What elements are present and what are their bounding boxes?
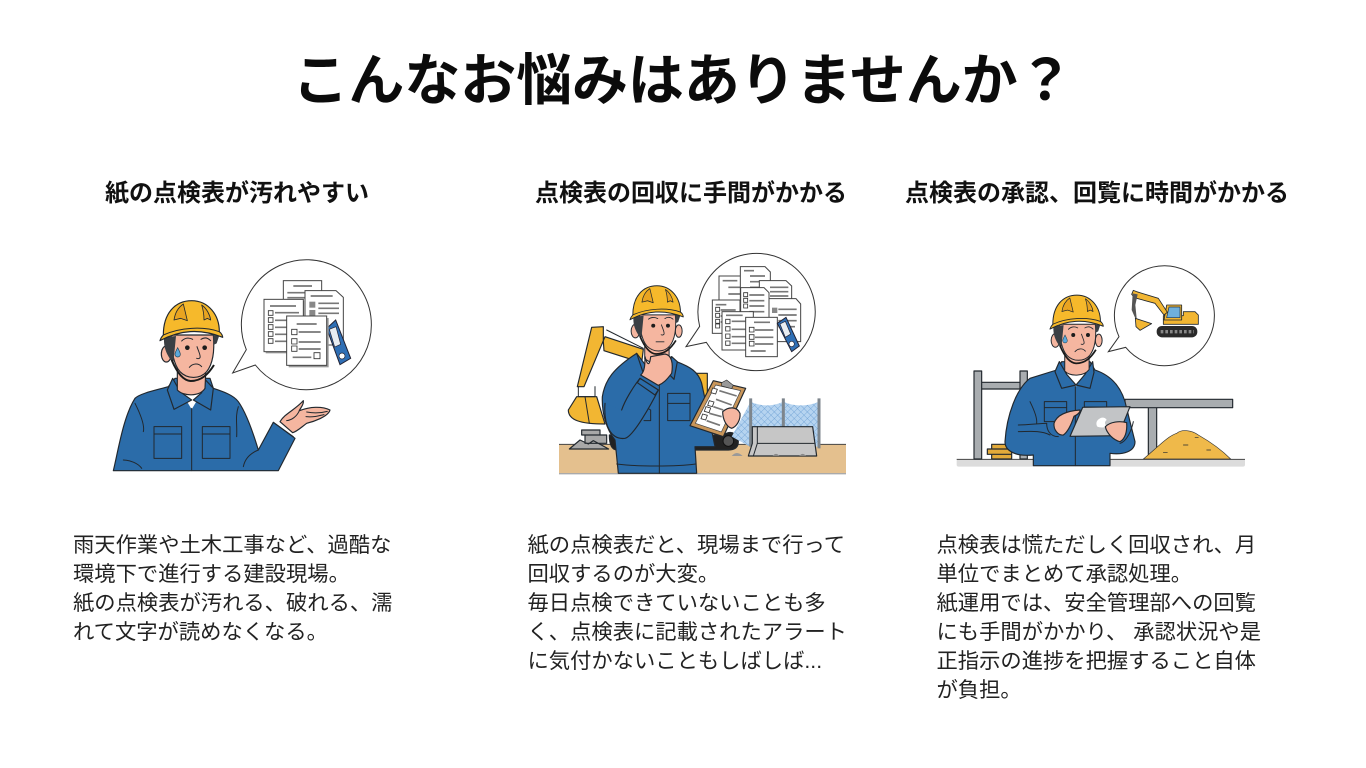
- body text: [528, 532, 847, 672]
- panel: collecting checklists: [528, 180, 847, 672]
- body text: 紙の点検表が汚れる、破れる、濡: [73, 590, 392, 614]
- worker body in blue coveralls: [113, 378, 295, 471]
- body text: にも手間がかかり、 承認状況や是: [936, 620, 1261, 644]
- speech bubble with documents: [233, 260, 371, 390]
- body text: 点検表は慌ただしく回収され、月: [936, 532, 1256, 556]
- sand pile: [1143, 431, 1231, 459]
- site structure and ground: [957, 371, 1245, 467]
- wooden planks: [987, 444, 1012, 459]
- body text: 回収するのが大変。: [528, 562, 719, 586]
- body text: 紙運用では、安全管理部への回覧: [936, 590, 1256, 614]
- body text: れて文字が読めなくなる。: [73, 620, 328, 644]
- tablet: [1070, 407, 1130, 436]
- panel: dirty paper checklists: [73, 180, 392, 644]
- illustration: worker at site with clipboard: [559, 252, 846, 474]
- concrete barrier: [732, 427, 817, 456]
- worker head and helmet: [160, 301, 223, 395]
- sleeve cuffs: [1047, 422, 1133, 443]
- fence: [732, 398, 819, 448]
- hand at chin: [641, 354, 672, 385]
- rubble: [569, 430, 609, 449]
- body text: く、点検表に記載されたアラート: [528, 620, 847, 644]
- heading: dirty paper: 紙の点検表が汚れやすい: [105, 180, 369, 207]
- excavator: [568, 327, 738, 450]
- heading: approval time: 点検表の承認、回覧に時間がかかる: [905, 180, 1289, 207]
- heading: collection effort: 点検表の回収に手間がかかる: [535, 180, 847, 207]
- worker head and helmet: [1050, 295, 1103, 375]
- body text: が負担。: [936, 678, 1022, 702]
- worker body: [602, 353, 715, 473]
- body text: に気付かないこともしばしば...: [528, 648, 822, 672]
- hand holding clipboard: [723, 408, 740, 428]
- ground: [559, 444, 846, 474]
- hands on tablet: [1054, 410, 1127, 442]
- illustration: worker with paper checklists: [112, 259, 372, 472]
- body text: 環境下で進行する建設現場。: [73, 562, 350, 586]
- body text: [936, 532, 1261, 702]
- body text: [73, 532, 392, 644]
- body text: 雨天作業や土木工事など、過酷な: [73, 532, 391, 556]
- body text: 単位でまとめて承認処理。: [936, 562, 1192, 586]
- body text: 紙の点検表だと、現場まで行って: [528, 532, 845, 556]
- speech bubble with many documents: [686, 253, 815, 371]
- worker hand: [280, 401, 330, 433]
- speech bubble with excavator: [1108, 266, 1214, 366]
- body text: 正指示の進捗を把握すること自体: [936, 648, 1256, 672]
- clipboard with checklist: [690, 380, 746, 437]
- worker head and helmet: [630, 286, 683, 367]
- worker body: [1005, 362, 1135, 466]
- illustration: worker with tablet: [956, 265, 1245, 467]
- title: こんなお悩みはありませんか？: [293, 49, 1073, 112]
- body text: 毎日点検できていないことも多: [528, 590, 826, 614]
- panel: approval and circulation: [905, 180, 1289, 702]
